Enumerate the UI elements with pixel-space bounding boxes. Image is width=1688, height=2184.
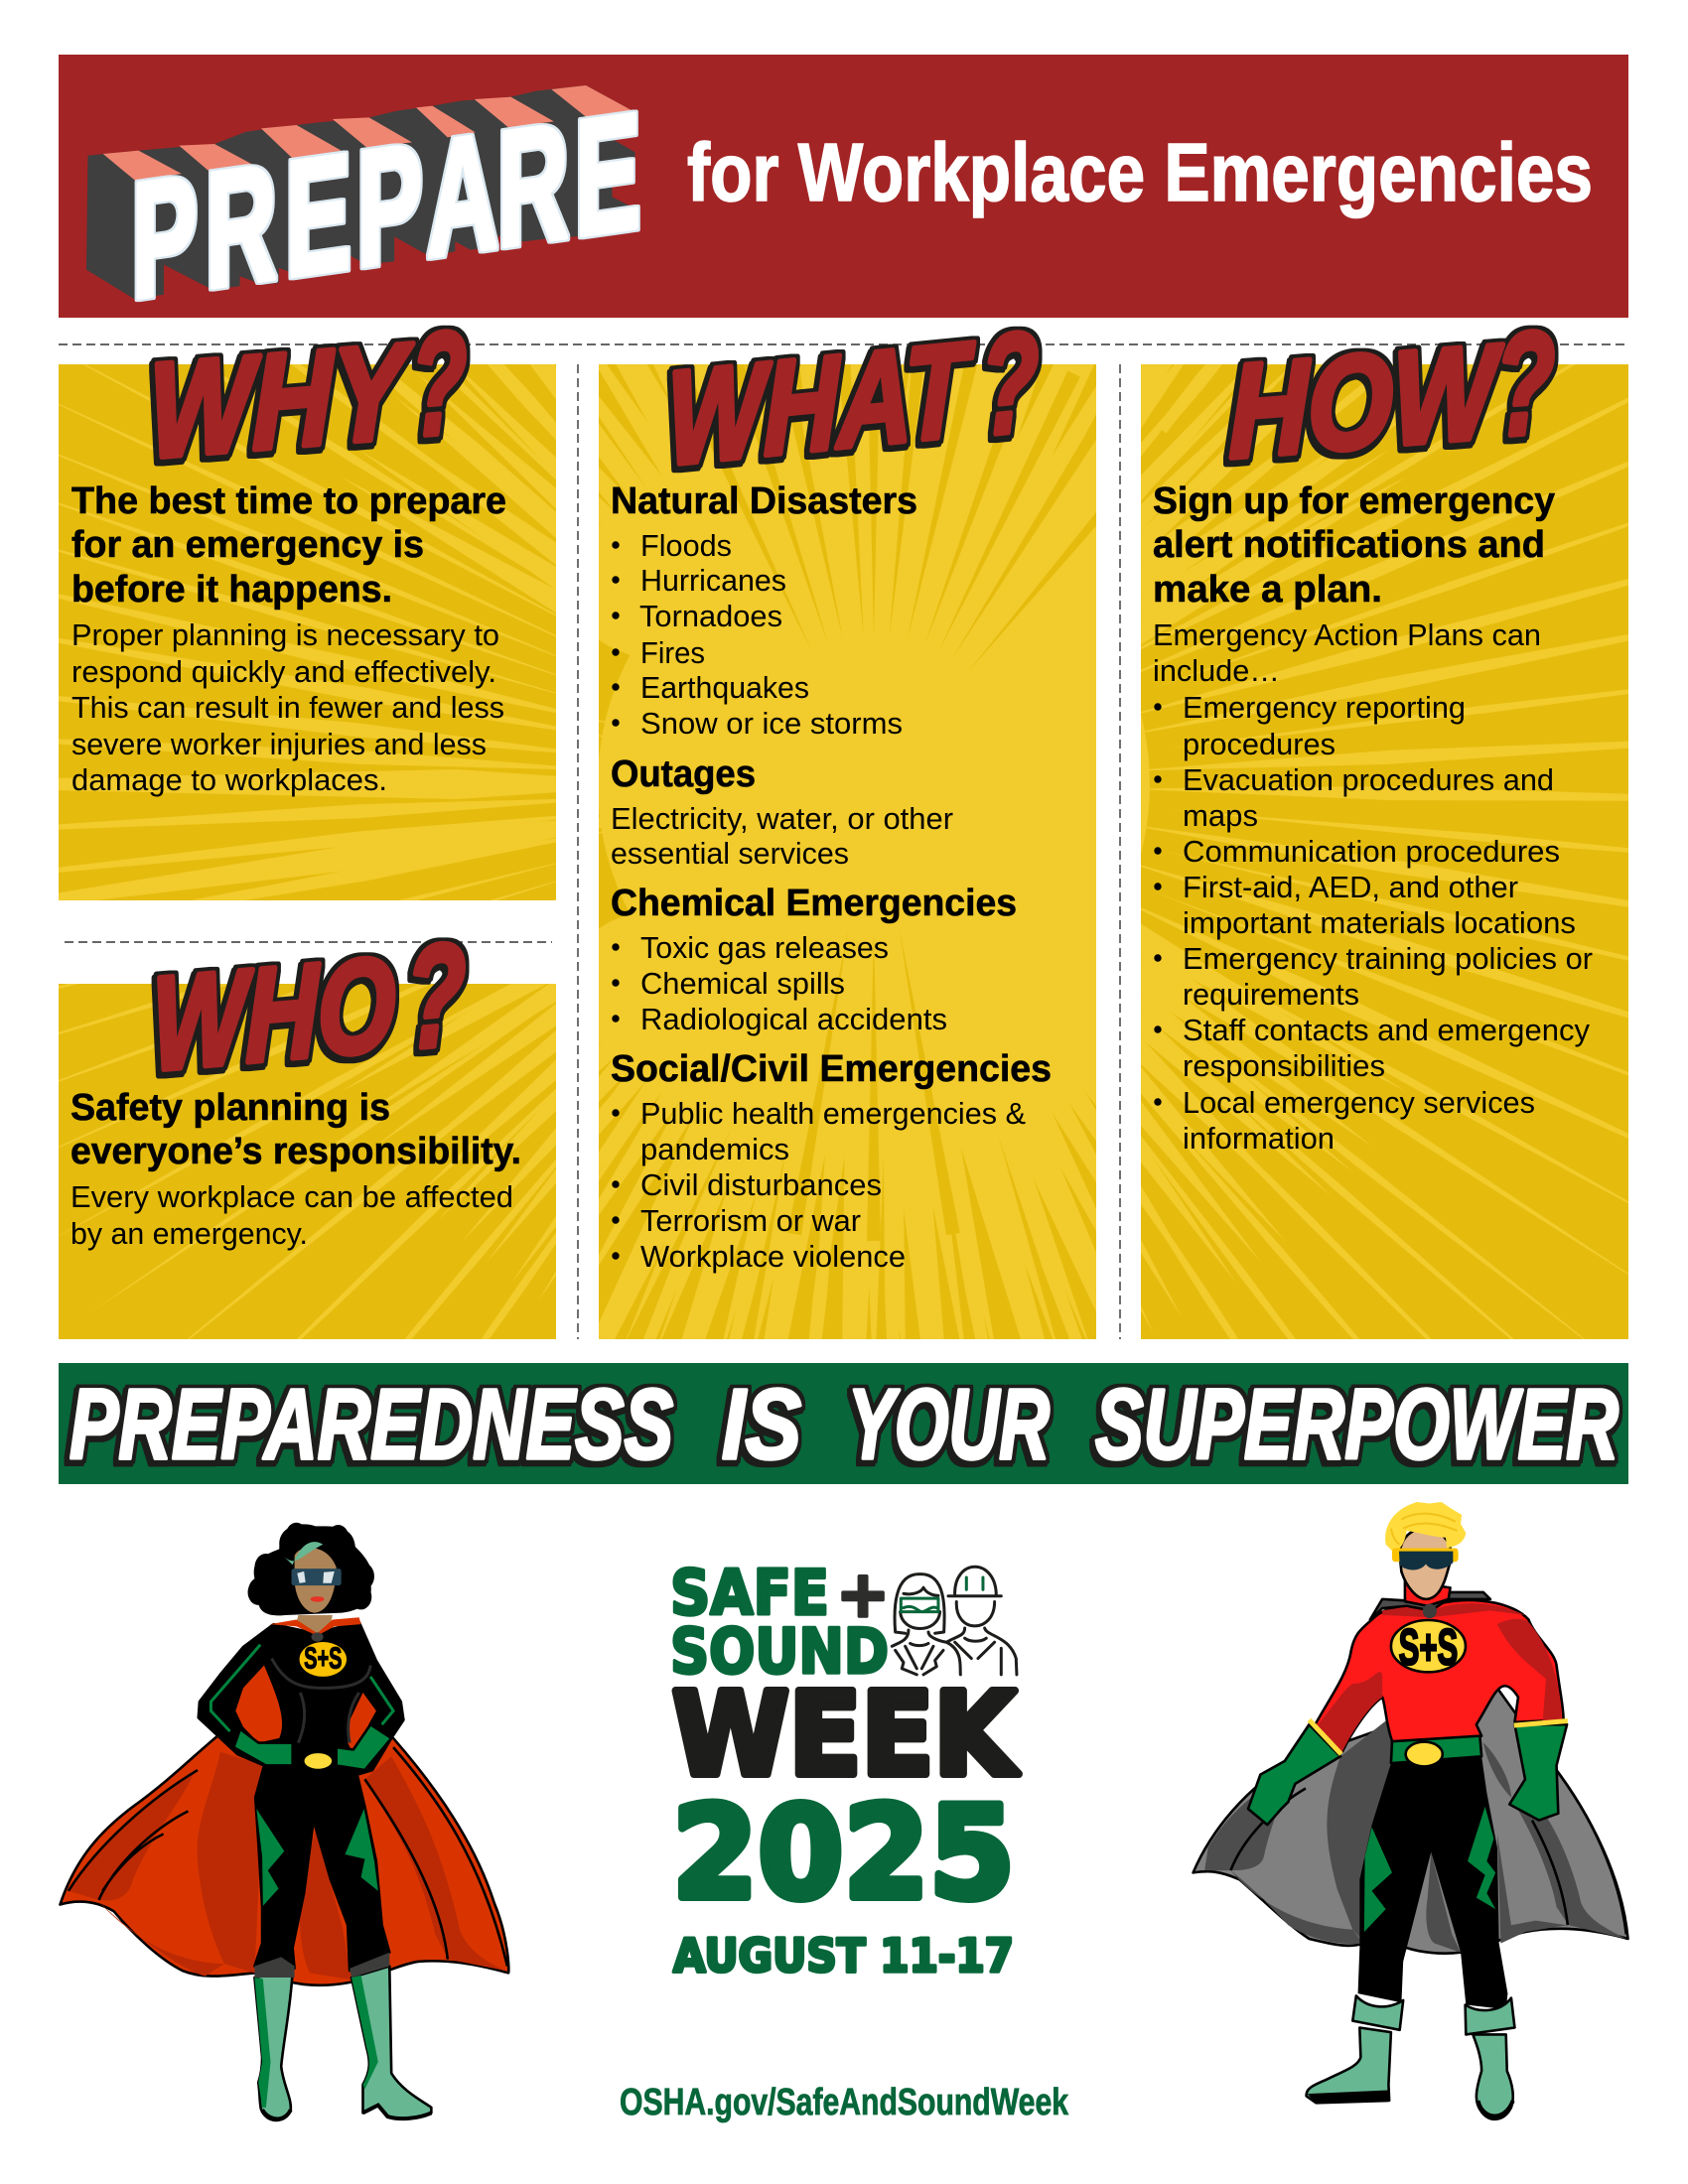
social list: Terrorism or war [640,1204,861,1238]
boots [254,1953,431,2120]
natural disasters list: Hurricanes [640,564,786,598]
panel: who text: Every workplace can be affected [70,1180,513,1214]
panel: why text: respond quickly and effectively. [71,655,496,689]
red torso and arms [1313,1600,1564,1752]
lips [311,1596,324,1602]
panel: how text: include… [1153,654,1280,688]
how list: procedures [1183,728,1336,761]
panel: why text: damage to workplaces. [71,763,387,797]
yellow panels with sunburst [59,364,1628,1339]
goggles [1392,1548,1459,1570]
WHAT heading: ? [981,303,1039,466]
cape collar [270,1617,361,1636]
panel: who text: by an emergency. [70,1217,308,1251]
chemical list: Chemical spills [640,967,845,1001]
panel: what text: Social/Civil Emergencies [611,1048,1052,1090]
how list: Communication procedures [1183,835,1560,869]
neck collar [1405,1581,1451,1606]
panel: what text: Electricity, water, or other [611,802,953,836]
social list: Public health emergencies & [640,1097,1026,1131]
WHO heading: WHO [152,929,395,1099]
social list: Civil disturbances [640,1168,882,1202]
icon: two workers [892,1567,1017,1675]
red shading [1316,1603,1562,1752]
how list: responsibilities [1183,1049,1385,1083]
boots [1307,1995,1514,2119]
cape gaps [235,1665,282,1743]
face [1400,1529,1452,1599]
panel: why text: The best time to prepare [71,480,506,522]
how list: Evacuation procedures and [1183,763,1554,797]
cape collar [1370,1592,1490,1620]
panel: why text [71,480,506,797]
PREPARE 3D word: PREPARE [131,79,640,335]
WHY heading: WHY [149,315,414,486]
how list: information [1183,1122,1335,1156]
chest line [272,1659,370,1743]
Safe + Sound Week logo: AUGUST 11-17 [673,1929,1014,1982]
how list: Emergency training policies or [1183,942,1593,976]
how list: Local emergency services [1183,1086,1535,1120]
panel: who text: Safety planning is [70,1087,390,1129]
Safe + Sound Week logo: + [836,1559,890,1632]
panel: how text: alert notifications and [1153,524,1545,566]
blond hair [1385,1502,1466,1553]
belt [1391,1736,1481,1766]
emblem: S+S [304,1641,342,1676]
Safe + Sound Week logo: SAFE [670,1557,829,1629]
panel: who text: everyone’s responsibility. [70,1131,521,1172]
panel: what text: Natural Disasters [611,480,917,522]
social list: pandemics [640,1133,789,1166]
panel: how text [1153,480,1593,1156]
black pants [1358,1756,1507,2009]
black suit [199,1622,403,1971]
leg lightning [256,1809,378,1906]
how list [1154,691,1593,1156]
title banner [59,55,1628,335]
Safe + Sound Week logo: 2025 [672,1780,1015,1928]
panel: what text: essential services [611,837,849,871]
slogan text: YOUR [848,1369,1050,1480]
face [295,1548,337,1636]
panel: why text: before it happens. [71,569,392,611]
panel: why text: This can result in fewer and less [71,691,504,725]
natural disasters list: Floods [640,529,732,563]
panel: how text: make a plan. [1153,569,1382,611]
green arm stripes and gloves [211,1645,393,1770]
HOW heading: HOW [1229,317,1503,486]
hair [248,1523,374,1615]
panel: how text: Sign up for emergency [1153,480,1555,522]
grey cape [1194,1688,1628,1954]
Safe + Sound Week logo: SOUND [670,1615,889,1688]
slogan text: PREPAREDNESS [70,1369,673,1480]
gloves [1248,1720,1568,1825]
goggles [292,1569,342,1585]
chemical list: Toxic gas releases [640,931,889,965]
slogan text [70,1369,1618,1480]
belt buckle [305,1753,332,1769]
hair streak [284,1542,323,1565]
how list: Emergency reporting [1183,691,1466,725]
WHO heading: ? [406,912,466,1079]
superhero woman [60,1523,508,2120]
website url: OSHA.gov/SafeAndSoundWeek [620,2082,1069,2123]
social list [612,1097,1026,1274]
Safe + Sound Week logo [670,1557,1020,1982]
HOW heading: ? [1495,300,1555,467]
how list: maps [1183,799,1258,833]
natural disasters list: Fires [640,636,705,670]
panel: why text: Proper planning is necessary to [71,618,499,652]
natural disasters list: Tornadoes [639,600,782,633]
Safe + Sound Week logo: WEEK [672,1669,1020,1802]
how list: important materials locations [1183,906,1576,940]
WHAT heading: WHAT [667,314,975,493]
chemical list: Radiological accidents [640,1003,947,1036]
panel: who text [70,1087,521,1251]
social list: Workplace violence [640,1240,906,1274]
panel: what text: Outages [611,753,756,795]
chemical list [612,931,947,1036]
natural disasters list: Snow or ice storms [640,707,903,741]
panel: how text: Emergency Action Plans can [1153,618,1541,652]
slogan text: IS [722,1369,801,1480]
panel: what text: Chemical Emergencies [611,883,1017,924]
leg lightning [1364,1807,1495,1932]
how list: requirements [1183,978,1359,1012]
natural disasters list [612,529,903,741]
superhero man [1194,1502,1628,2119]
how list: Staff contacts and emergency [1183,1014,1591,1047]
emblem: S+S [1399,1620,1458,1676]
red cape [60,1733,508,1985]
panel: why text: severe worker injuries and less [71,728,487,761]
clasp [311,1632,324,1642]
how list: First-aid, AED, and other [1183,871,1518,904]
panel: what text [611,480,1052,1274]
green slogan band [59,1363,1628,1484]
dashed dividers [59,344,1628,1339]
natural disasters list: Earthquakes [640,671,809,705]
WHY heading: ? [411,301,467,467]
panel: why text: for an emergency is [71,524,424,566]
clasp [1423,1603,1437,1618]
